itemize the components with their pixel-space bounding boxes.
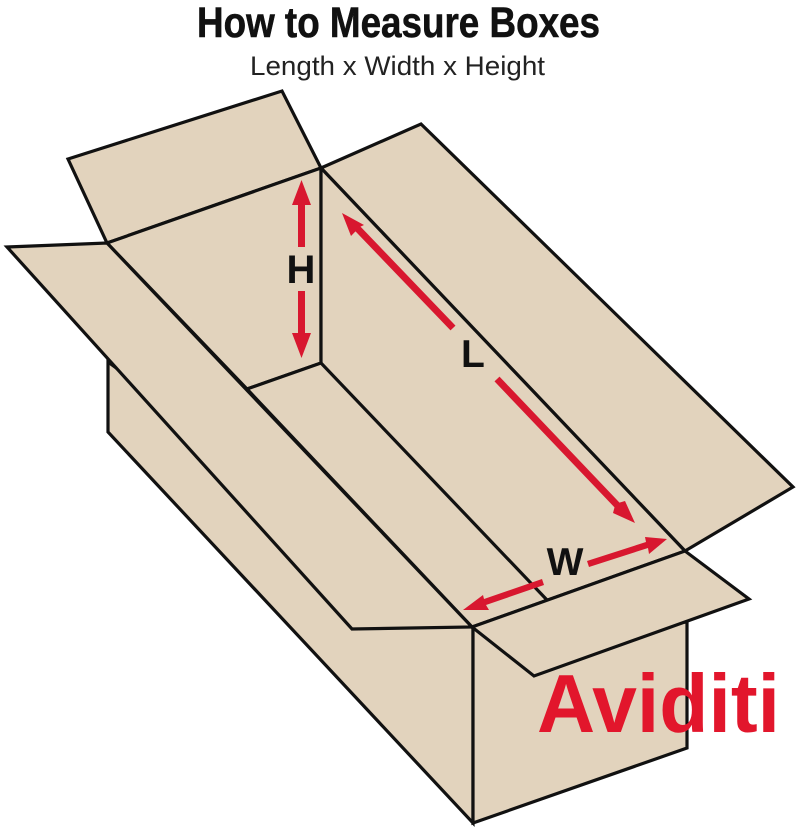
back flap <box>68 91 321 243</box>
front face of box <box>473 622 687 823</box>
floor crease <box>321 363 547 600</box>
length label: L <box>461 333 485 376</box>
width arrow <box>463 537 667 610</box>
subtitle: Length x Width x Height <box>250 51 546 81</box>
height arrow <box>292 180 311 358</box>
left side of box <box>108 362 473 823</box>
box floor and inner right wall <box>247 168 685 627</box>
height label: H <box>287 248 315 292</box>
title: How to Measure Boxes <box>197 0 600 47</box>
back inner wall <box>107 168 321 389</box>
right flap <box>321 124 793 551</box>
front flap <box>472 551 749 676</box>
width label: W <box>547 541 584 584</box>
left flap <box>7 243 472 629</box>
brand watermark: Aviditi <box>537 657 780 750</box>
length arrow <box>342 213 635 523</box>
